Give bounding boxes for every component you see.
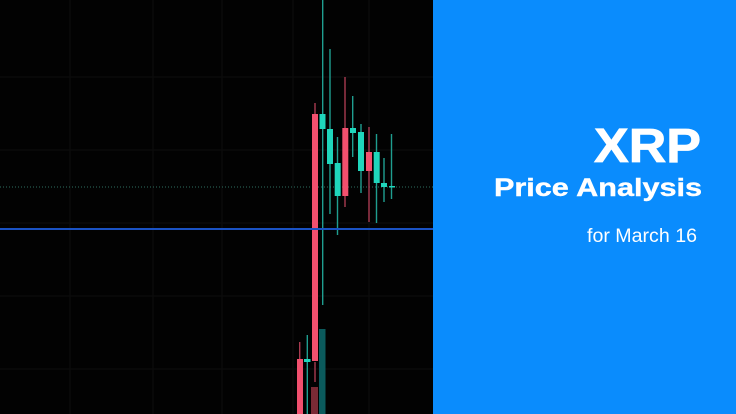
subheading: date: for March 16 (587, 226, 697, 247)
volume bars (311, 329, 326, 414)
candlestick chart (297, 0, 395, 414)
blue support line (0, 228, 433, 230)
panel: title (433, 0, 736, 414)
teal candle bodies (304, 114, 395, 362)
red candle bodies (297, 114, 372, 414)
panel: chart background (0, 0, 433, 414)
wicks (300, 0, 392, 414)
heading: XRP: XRP (594, 120, 701, 173)
heading: Price Analysis: Price Analysis (494, 174, 702, 202)
dotted current price line (0, 186, 433, 188)
